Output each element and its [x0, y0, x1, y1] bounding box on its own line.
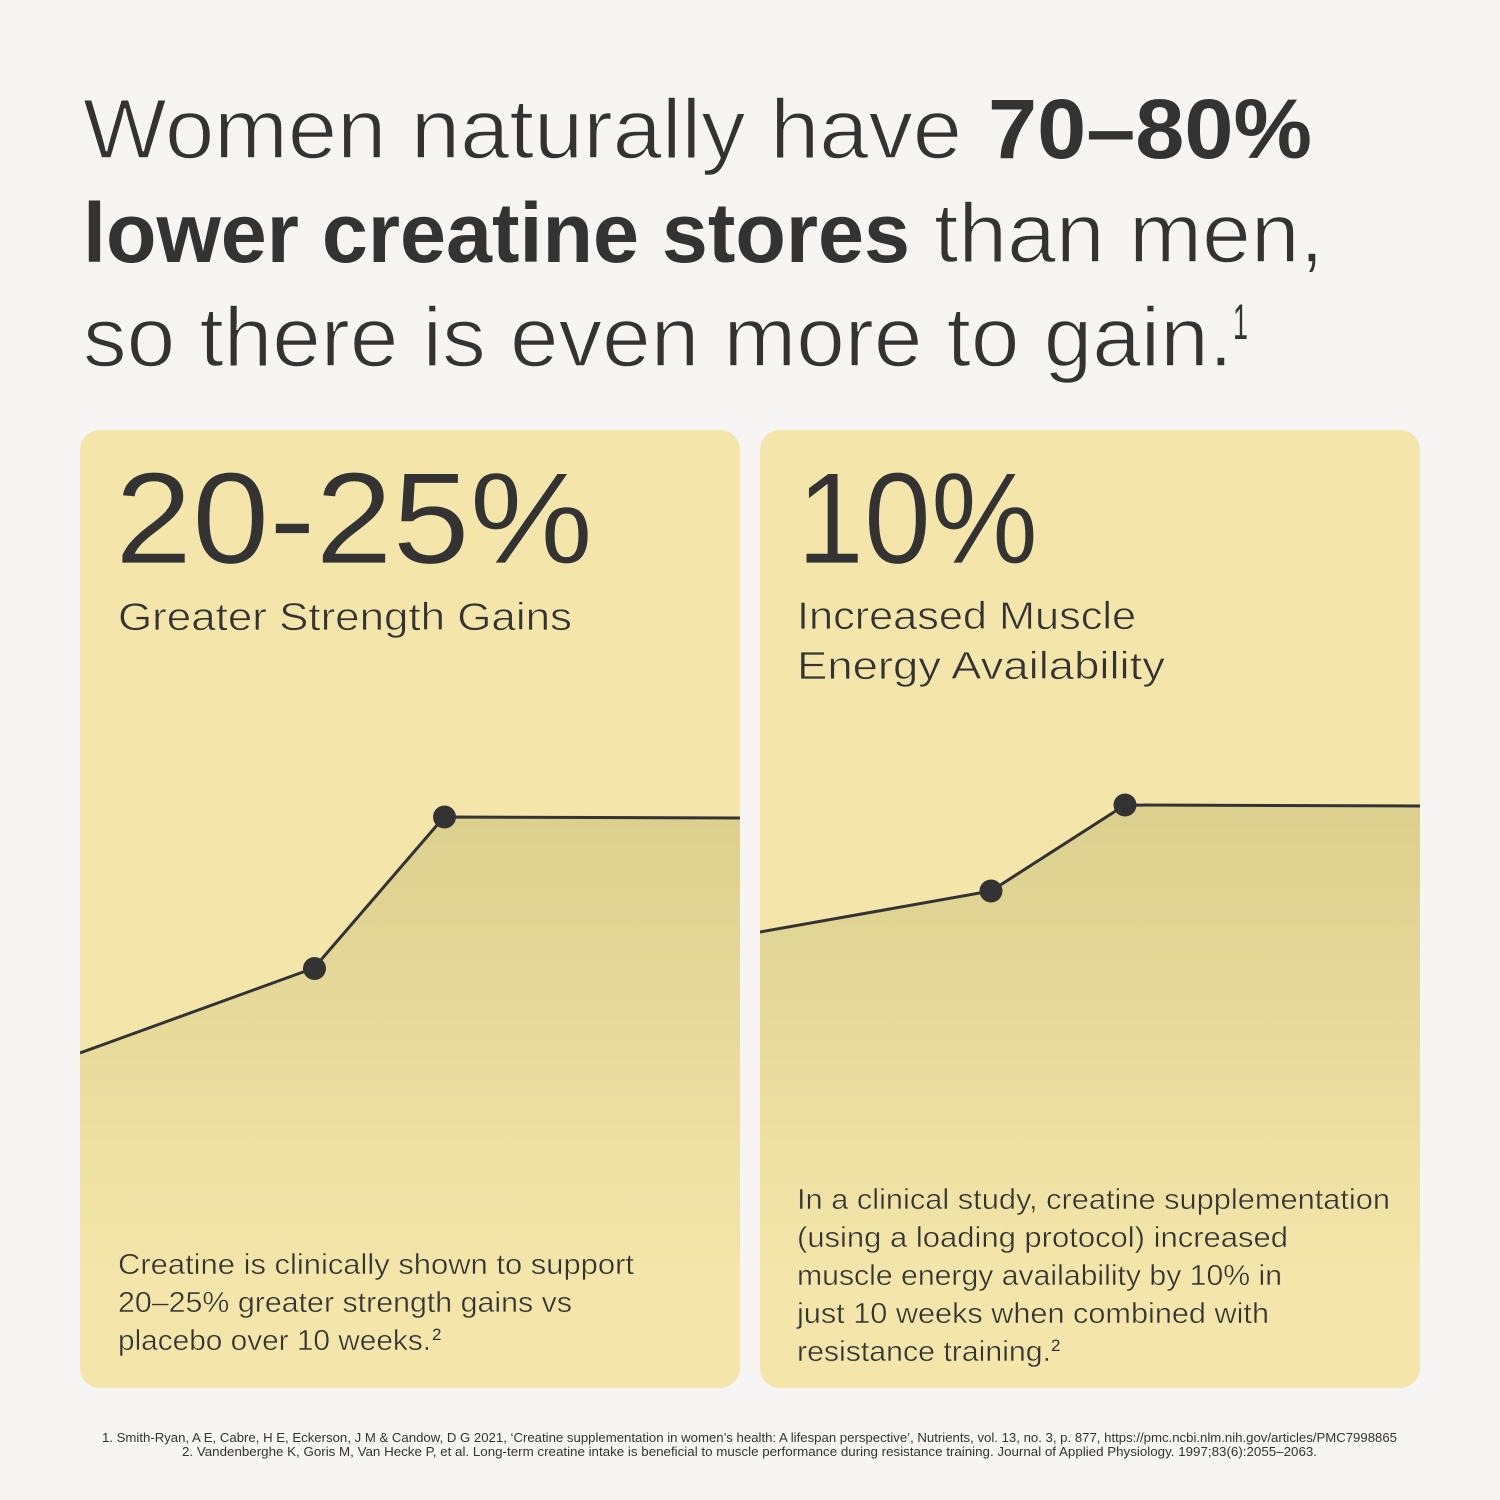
body text: muscle energy: muscle energy availability by 10% in: [797, 1260, 1282, 1292]
body text: muscle energy: In a clinical study, creatine supplementation: [797, 1184, 1390, 1216]
title: lower creatine stores: [83, 186, 910, 280]
body text: muscle energy: (using a loading protocol) increased: [797, 1222, 1288, 1254]
footnotes: 1. Smith-Ryan, A E, Cabre, H E, Eckerson, J M & Candow, D G 2021, ‘Creatine supplementation in women’s health: A lifespan perspective’, Nutrients, vol. 13, no. 3, p. 877, https://pmc.ncbi.nlm.nih.gov/articles/PMC7998865: [102, 1431, 1397, 1445]
body text: muscle energy: 2: [1051, 1336, 1060, 1355]
chart: strength gains curve: [80, 806, 740, 1388]
title: 1: [1233, 294, 1248, 350]
body text: muscle energy: just 10 weeks when combined with: [796, 1298, 1269, 1330]
body text: strength gains: Creatine is clinically shown to support: [118, 1249, 634, 1281]
footnotes: 2. Vandenberghe K, Goris M, Van Hecke P, et al. Long-term creatine intake is beneficial to muscle performance during resistance training. Journal of Applied Physiology. 1997;83(6):2055–2063.: [182, 1445, 1317, 1459]
title: so there is even more to gain.: [83, 290, 1233, 384]
title: [83, 82, 1324, 384]
body text: muscle energy: [796, 1184, 1390, 1368]
chart: muscle energy curve: [760, 794, 1420, 1388]
panel: strength gains: [80, 430, 740, 1388]
big stat: 10%: 10%: [797, 445, 1038, 591]
big stat: 20-25%: 20-25%: [115, 445, 593, 591]
panel: muscle energy: [760, 430, 1420, 1388]
body text: strength gains: 2: [432, 1325, 441, 1344]
panel heading: increased muscle energy availability: Energy Availability: [797, 645, 1166, 688]
panel heading: greater strength gains: Greater Strength Gains: [118, 596, 572, 639]
panel heading: increased muscle energy availability: [797, 595, 1166, 688]
title: Women naturally have: [83, 82, 962, 176]
body text: strength gains: 20–25% greater strength gains vs: [118, 1287, 572, 1319]
body text: strength gains: placebo over 10 weeks.: [118, 1325, 431, 1357]
body text: muscle energy: resistance training.: [797, 1336, 1051, 1368]
title: 70–80%: [988, 82, 1312, 176]
footnotes: [102, 1431, 1397, 1459]
panel heading: increased muscle energy availability: Increased Muscle: [797, 595, 1136, 638]
title: than men,: [934, 186, 1324, 280]
body text: strength gains: [118, 1249, 634, 1357]
